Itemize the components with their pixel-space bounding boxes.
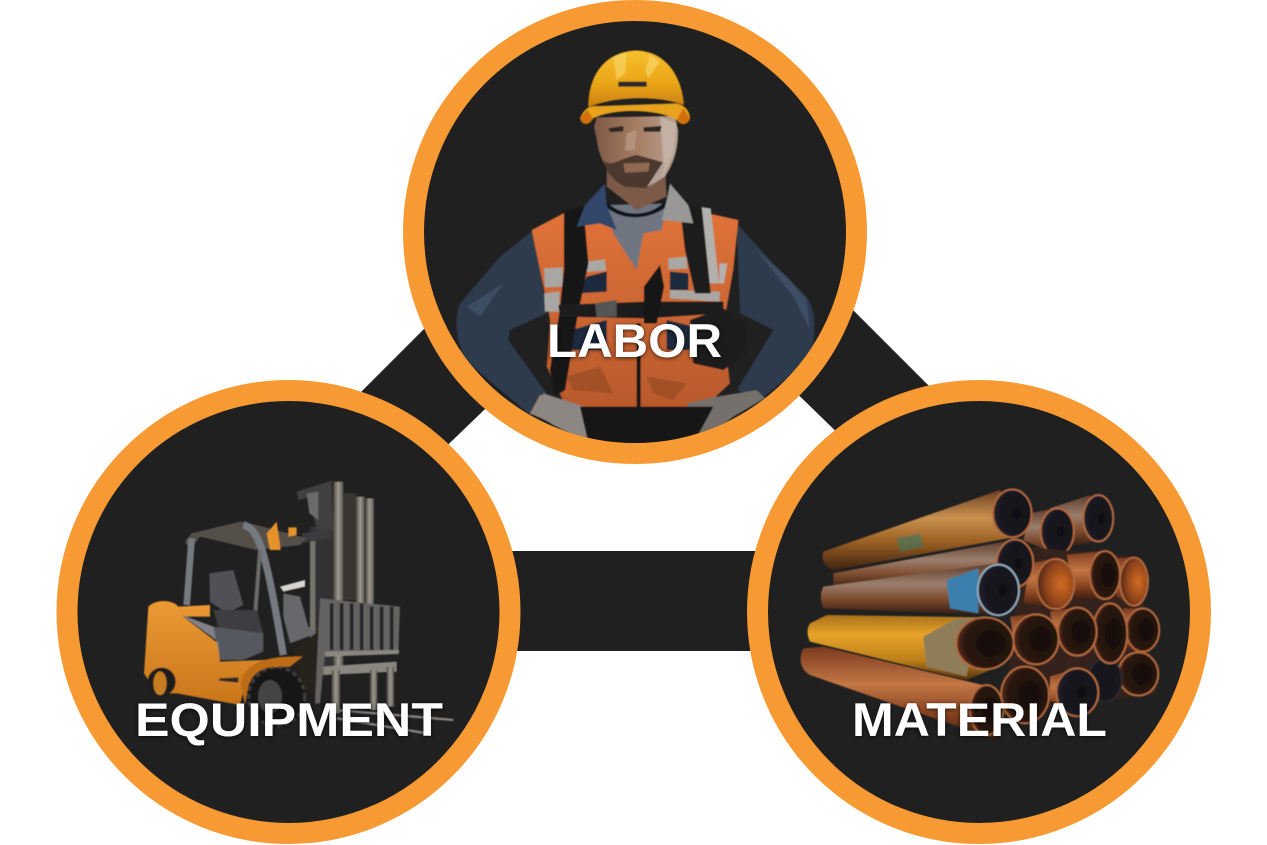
photo: orange forklift — [144, 481, 453, 733]
label: LABOR: LABOR — [547, 314, 722, 367]
connector: top circle to right circle — [780, 287, 948, 445]
connector: left circle to right circle — [500, 551, 770, 651]
panel: equipment — [67, 390, 510, 834]
label: MATERIAL: MATERIAL — [852, 693, 1107, 746]
panel: material — [758, 390, 1200, 834]
panel: labor — [414, 10, 856, 454]
label: EQUIPMENT: EQUIPMENT — [135, 693, 443, 746]
photo: construction worker in hard hat and orange vest — [456, 51, 815, 450]
photo: stack of copper pipes — [801, 489, 1159, 740]
connector: left circle to top circle — [341, 302, 510, 462]
